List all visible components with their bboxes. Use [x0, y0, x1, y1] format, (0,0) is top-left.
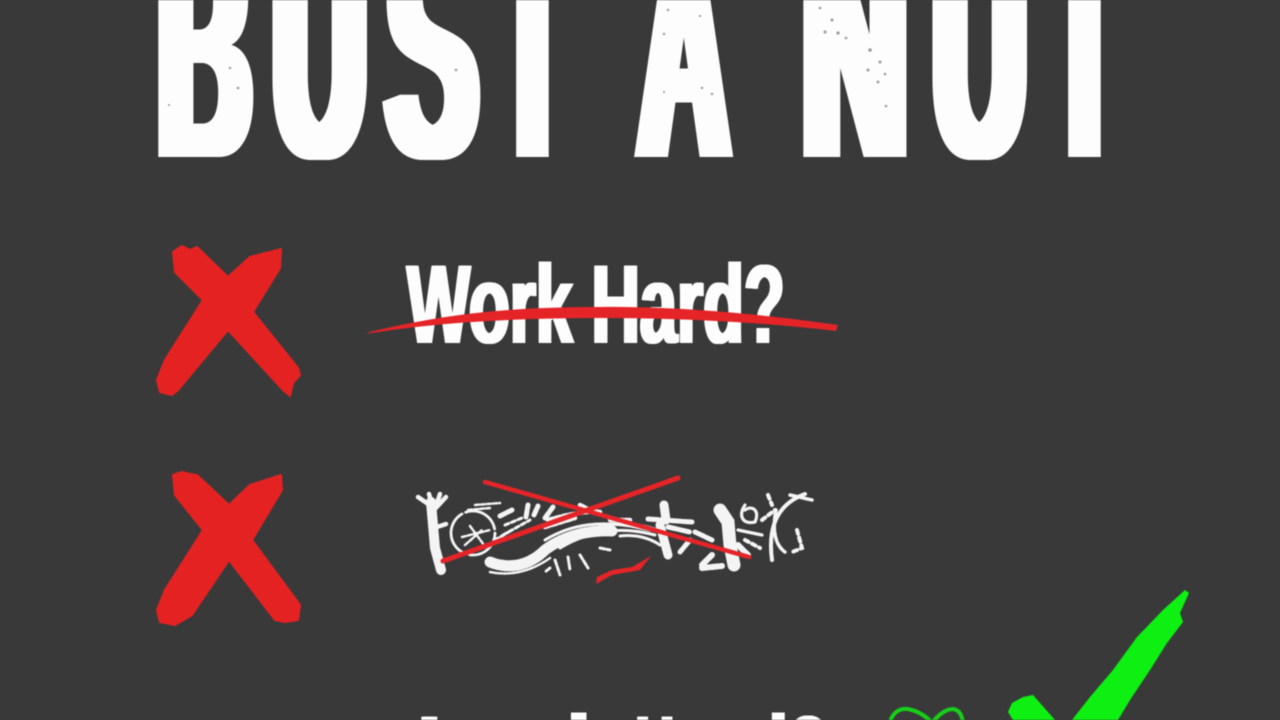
text: Look Hard?	[418, 700, 828, 720]
icon: red X, second row	[157, 472, 300, 625]
text: Work Hard?: Work Hard?	[407, 242, 785, 367]
icon: red X, first row	[157, 246, 300, 396]
title speckle texture	[168, 7, 887, 107]
icon: green check mark	[1008, 590, 1189, 720]
red cross over the illegible phrase	[443, 478, 749, 561]
title	[158, 0, 1121, 161]
strikethrough over Work Hard?	[366, 307, 838, 333]
green outline bow mark	[890, 709, 963, 720]
distressed illegible white phrase	[418, 494, 812, 575]
red stray brush mark	[596, 556, 651, 584]
